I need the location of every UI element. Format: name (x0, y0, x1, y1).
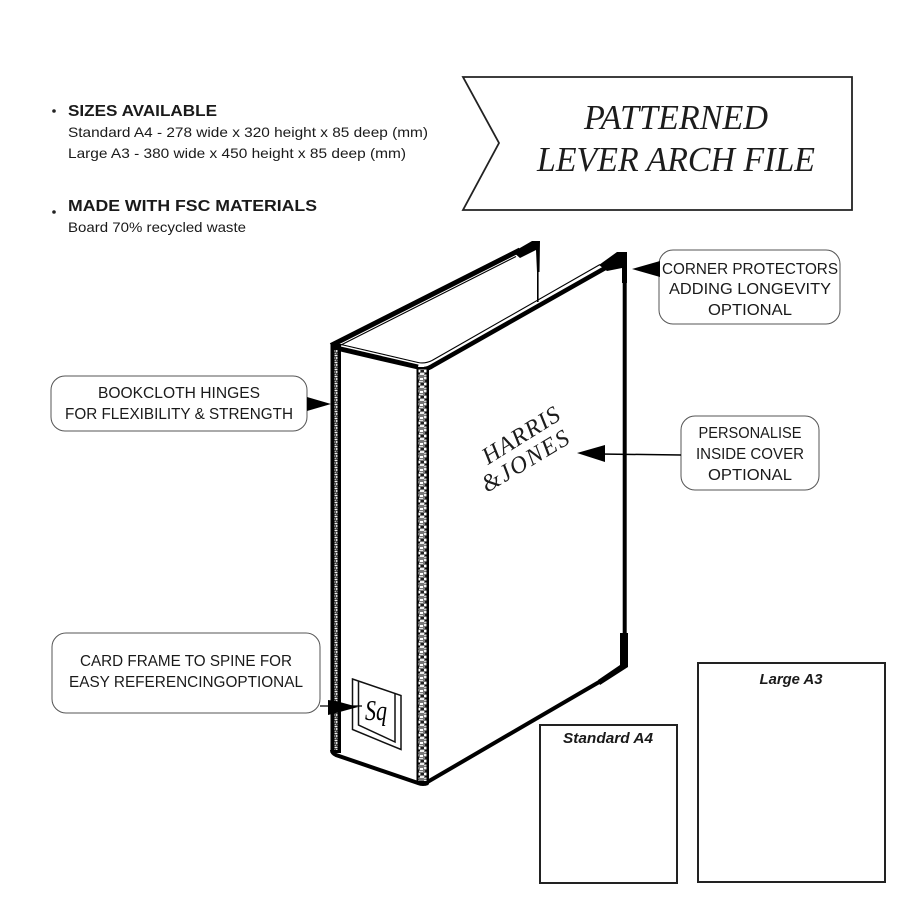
callout: card frame (52, 633, 320, 713)
title banner (463, 77, 852, 210)
back board inner line (341, 256, 516, 345)
icon: top corner protector (599, 252, 627, 283)
front board top edge (424, 267, 607, 369)
callout: personalise: OPTIONAL (708, 467, 792, 484)
title banner: PATTERNED (583, 98, 768, 137)
spine bottom edge (332, 750, 428, 784)
back board vertical edge (537, 270, 539, 302)
text: standard A4 dimensions: Standard A4 - 278 wide x 320 height x 85 deep (mm) (68, 124, 428, 140)
back board top edge (331, 250, 520, 346)
bullet: materials (52, 210, 56, 214)
front board right edge (623, 280, 627, 640)
icon: bottom corner protector (598, 633, 628, 685)
panel: specifications (52, 103, 428, 235)
bullet: sizes (52, 109, 56, 113)
callout: corner protectors: CORNER PROTECTORS (662, 261, 838, 278)
callout: card frame: EASY REFERENCINGOPTIONAL (69, 674, 303, 691)
callout: bookcloth hinges: FOR FLEXIBILITY & STRENGTH (65, 406, 293, 423)
size box: standard A4: Standard A4 (563, 731, 653, 747)
size box: large A3 (698, 663, 885, 882)
callout: corner protectors: OPTIONAL (708, 302, 792, 319)
callout: corner protectors: ADDING LONGEVITY (669, 281, 831, 298)
arrow: personalise (577, 445, 681, 462)
card frame (352, 679, 401, 750)
top panel inner line (341, 344, 432, 363)
size box: large A3: Large A3 (760, 672, 822, 688)
card frame: Sq (365, 695, 387, 727)
callout: card frame: CARD FRAME TO SPINE FOR (80, 653, 292, 670)
logo: Harris & Jones: &JONES (477, 425, 574, 498)
callout: personalise: PERSONALISE (698, 425, 802, 442)
callout: corner protectors (659, 250, 840, 324)
arrow: card frame (320, 700, 362, 715)
callout: bookcloth hinges (51, 376, 307, 431)
top panel front edge (332, 347, 418, 367)
bookcloth hinge: right (416, 367, 429, 784)
callout: personalise (681, 416, 819, 490)
heading: FSC materials: MADE WITH FSC MATERIALS (68, 198, 317, 215)
heading: sizes available: SIZES AVAILABLE (68, 103, 217, 120)
front board inner line (432, 264, 600, 360)
title banner: LEVER ARCH FILE (536, 140, 815, 179)
arrow: bookcloth hinges (307, 397, 331, 411)
arrow: corner protectors (632, 261, 660, 277)
front board bottom edge (424, 678, 606, 784)
callout: personalise: INSIDE COVER (696, 446, 804, 463)
logo: Harris & Jones: HARRIS (477, 402, 565, 471)
illustration: lever arch file (330, 241, 628, 784)
bookcloth hinge: left (330, 344, 341, 753)
callout: bookcloth hinges: BOOKCLOTH HINGES (98, 385, 260, 402)
icon: back corner protector (513, 241, 540, 272)
text: recycled board: Board 70% recycled waste (68, 219, 246, 235)
text: large A3 dimensions: Large A3 - 380 wide x 450 height x 85 deep (mm) (68, 145, 406, 161)
size box: standard A4 (540, 725, 677, 883)
